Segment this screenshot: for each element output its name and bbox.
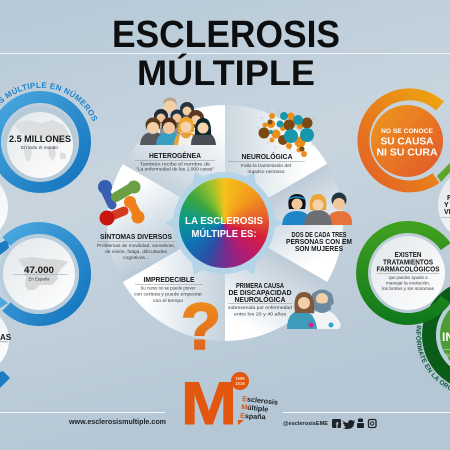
panel: left column, cifras (0, 82, 98, 388)
text: síntomas diversos: de visión, fatiga, dificultades (105, 249, 168, 255)
text: primera causa: DE DISCAPACIDAD (228, 288, 292, 297)
text: impredecible: con certeza y puede empeorar (134, 292, 202, 298)
segment: síntomas diversos (107, 164, 225, 282)
text: dos de cada tres (286, 230, 352, 253)
ring: mundo: 2.5 MILLONES (9, 134, 72, 145)
circle: partially cropped message: Y (444, 202, 449, 209)
ring: tratamientos: manejar la evolución, (386, 280, 430, 286)
ring: no se conoce: NI SU CURA (376, 148, 438, 158)
icon: group of people (140, 98, 216, 145)
text: síntomas diversos (97, 232, 175, 261)
title: ESCLEROSIS (112, 14, 340, 56)
ring: mundo: En todo el mundo (21, 145, 58, 151)
ring: España: 47.000 (24, 265, 54, 276)
text: neurológica: Falla la transmisión del (241, 163, 291, 169)
ring: no se conoce (363, 94, 450, 186)
text: neurológica: impulso nervioso (248, 169, 285, 175)
text: impredecible: Su curso no se puede prever (140, 286, 196, 292)
text: heterogénea: HETEROGÉNEA (149, 151, 202, 160)
text: heterogénea (135, 151, 215, 172)
ring: tratamientos: TRATAMIENTOS (383, 258, 433, 266)
icon: twitter bird (343, 420, 355, 429)
ring: España (0, 228, 85, 320)
front row (140, 132, 167, 145)
ring: dark green (429, 286, 450, 384)
title: MÚLTIPLE (137, 53, 315, 93)
ring: tercer círculo parcial (0, 297, 12, 388)
ring: España: En España (28, 276, 50, 282)
panel: wheel (107, 105, 343, 341)
icon: facebook (332, 419, 341, 430)
ring: tratamientos (362, 227, 446, 319)
ring: no se conoce: SU CAUSA (380, 136, 434, 148)
footer: logo: M (181, 370, 237, 437)
text: primera causa (228, 281, 292, 318)
text: dos de cada tres: PERSONAS CON EM (286, 237, 352, 246)
footer: logo (181, 370, 279, 437)
text: primera causa: PRIMERA CAUSA (236, 281, 285, 290)
text: heterogénea: "La enfermedad de las 1.000 caras" (136, 166, 214, 172)
circle: partially cropped message (438, 169, 450, 241)
text: primera causa: sobrevenida por enfermedad (228, 305, 292, 311)
footer: logo: 2016 (235, 381, 245, 386)
segment: neurológica (225, 105, 327, 223)
ring: tratamientos: FARMACOLÓGICOS (376, 264, 440, 274)
footer: handle: @esclerosisEME (283, 421, 328, 427)
text: dos de cada tres: SON MUJERES (295, 244, 343, 253)
segment: dos de cada tres (225, 164, 343, 282)
ring around hub with pointers (165, 172, 283, 275)
text: síntomas diversos: cognitivos... (123, 255, 149, 261)
ring: tercer círculo parcial: AS (0, 333, 12, 342)
text: neurológica (228, 152, 305, 175)
text: primera causa: entre los 20 y 40 años (234, 312, 287, 318)
icon: youtube (357, 418, 364, 428)
text: heterogénea: También recibe el nombre de (140, 162, 210, 168)
segment: primera causa (225, 223, 327, 341)
footer: logo: 1996 (235, 376, 245, 381)
text: síntomas diversos: Problemas de movilidad, sensitivas, (97, 243, 175, 249)
hub: la esclerosis múltiple es: LA ESCLEROSIS (185, 215, 263, 227)
ring: mundo (0, 97, 85, 187)
text: dos de cada tres: DOS DE CADA TRES (292, 230, 347, 239)
ring: segundo círculo parcial (0, 171, 9, 255)
icon: question mark: ? (181, 289, 221, 363)
title (112, 14, 340, 93)
footer: logo: Múltiple (241, 402, 269, 414)
ring: tratamientos: EXISTEN (394, 250, 422, 259)
footer: website: www.esclerosismultiple.com (68, 417, 166, 426)
footer: logo: Esclerosis (242, 394, 279, 407)
ring: tratamientos: los brotes y los síntomas (382, 286, 435, 292)
text: impredecible: IMPREDECIBLE (144, 275, 195, 284)
text: impredecible (134, 275, 203, 304)
hub: la esclerosis múltiple es: MÚLTIPLE ES: (192, 227, 256, 240)
segment: heterogénea (123, 105, 225, 223)
text: neurológica: NEUROLÓGICA (242, 152, 293, 161)
text: síntomas diversos: SÍNTOMAS DIVERSOS (100, 232, 172, 241)
icon: facebook: f (336, 420, 339, 430)
icon: brain of dots (257, 109, 318, 157)
ring: tratamientos: que pueden ayudar a (388, 275, 428, 281)
footer: logo: España (240, 411, 267, 421)
text: primera causa: NEUROLÓGICA (234, 295, 286, 304)
text: impredecible: con el tiempo (153, 298, 183, 304)
icon: two doctors (287, 290, 341, 329)
icon: three people (282, 192, 352, 225)
ring: no se conoce: NO SE CONOCE (381, 128, 434, 135)
hub: la esclerosis múltiple es (179, 178, 269, 268)
icon: instagram (368, 420, 376, 428)
segment: impredecible (123, 223, 225, 341)
icon: molecule (98, 180, 144, 226)
